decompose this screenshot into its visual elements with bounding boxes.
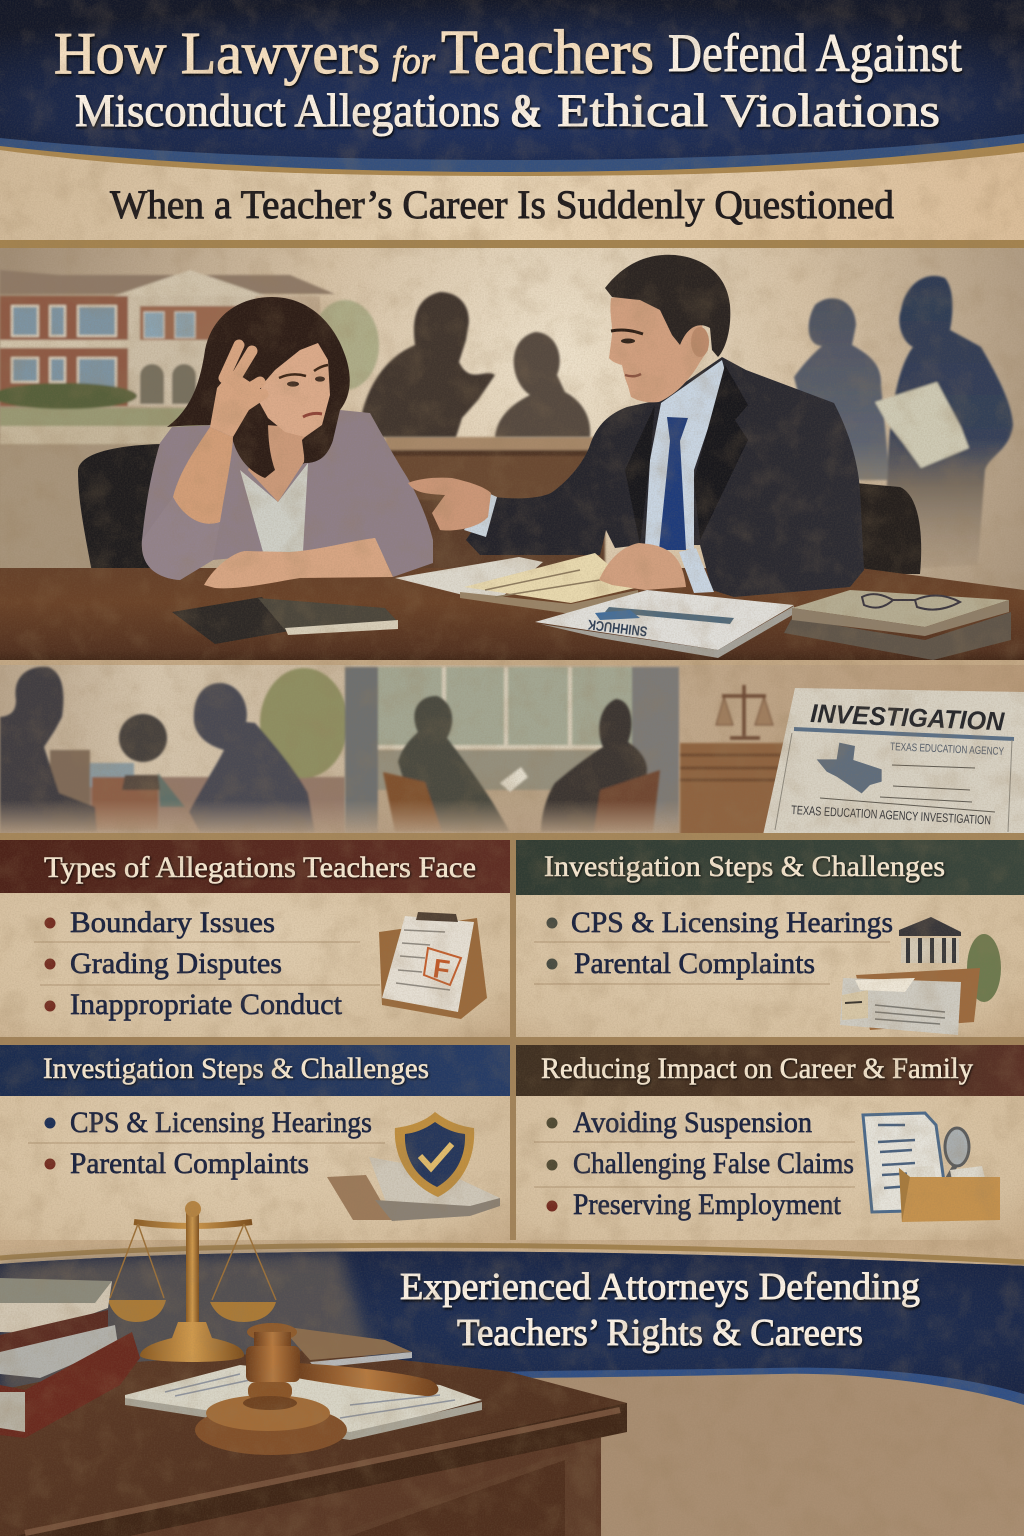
- hair over neck: [232, 415, 275, 478]
- tee: [240, 463, 308, 552]
- title line 2: Misconduct Allegations: [75, 85, 500, 137]
- icon: stack of law books: [0, 1278, 140, 1438]
- school building: [0, 270, 379, 570]
- family scene: [0, 667, 348, 835]
- list: Grading Disputes: [70, 947, 282, 980]
- panel heading: Types of Allegations Teachers Face: [44, 851, 476, 884]
- list: Boundary Issues: [70, 906, 275, 939]
- panel: investigation steps (bottom left): [0, 1045, 510, 1245]
- man: lawyer in suit: [408, 255, 864, 597]
- left adult silhouette: [0, 667, 97, 835]
- title line 1: [54, 19, 962, 87]
- list: CPS & Licensing Hearings: [571, 906, 893, 939]
- raised forearm: [173, 427, 233, 524]
- woman: worried teacher: [142, 297, 433, 588]
- cardigan: [142, 410, 433, 580]
- shirt cuff: [464, 493, 497, 537]
- neck and chest: [248, 425, 306, 502]
- texas map: [817, 743, 882, 793]
- face: [258, 343, 330, 437]
- title line 2: [75, 85, 940, 137]
- panel heading bar: [0, 840, 510, 893]
- raised hand: [210, 345, 263, 437]
- panel heading bar: [516, 840, 1024, 895]
- man's chair: [855, 483, 921, 574]
- panel heading: Investigation Steps & Challenges: [43, 1052, 429, 1085]
- icon: shield with check over books: [327, 1112, 500, 1221]
- panel: types of allegations: [0, 840, 510, 1037]
- woman's chair: [78, 444, 162, 572]
- window and curtains: [345, 667, 679, 835]
- icon: wooden gavel: [195, 1323, 438, 1455]
- closing line 2: Teachers’ Rights & Careers: [457, 1312, 863, 1354]
- list: [546, 1106, 854, 1221]
- list: Parental Complaints: [70, 1147, 309, 1180]
- man's eyes: [611, 330, 643, 376]
- hair: [167, 297, 350, 478]
- panel heading: Reducing Impact on Career & Family: [541, 1052, 973, 1085]
- title line 1: Defend Against: [668, 23, 962, 83]
- legal papers: [395, 553, 638, 614]
- title line 2: Ethical Violations: [557, 85, 940, 137]
- silhouettes: officials at right: [794, 276, 1013, 570]
- panel: investigation steps (top right): [516, 840, 1024, 1037]
- list: Preserving Employment: [573, 1188, 842, 1221]
- sleeve cuff: [142, 497, 220, 580]
- title line 1: How Lawyers: [54, 20, 380, 86]
- icon: clipboard with failing grade: [379, 912, 487, 1019]
- panel dividers: [0, 840, 1024, 1245]
- icon: brass scales: [108, 1201, 276, 1362]
- document under gavel: [125, 1326, 482, 1440]
- panel heading bar: [0, 1045, 510, 1096]
- title line 1: Teachers: [441, 19, 654, 87]
- eyes and brows: [279, 365, 328, 417]
- list: CPS & Licensing Hearings: [70, 1106, 372, 1139]
- title line 2: &: [510, 85, 542, 137]
- footer background: [0, 1240, 1024, 1536]
- notebook: [172, 597, 398, 644]
- list: Avoiding Suspension: [573, 1106, 812, 1139]
- silhouettes: parent and child in centre: [358, 292, 590, 437]
- ear: [691, 327, 709, 357]
- pointing hand: [408, 478, 491, 530]
- list: [44, 906, 343, 1021]
- subtitle band: [0, 130, 1024, 242]
- panel heading bar: [516, 1045, 1024, 1096]
- hand on documents: [599, 543, 714, 593]
- interview silhouettes: [383, 696, 660, 832]
- list: Parental Complaints: [574, 947, 815, 980]
- investigation document: [763, 688, 1024, 835]
- lower scenes strip: [0, 665, 1024, 840]
- child silhouette: [119, 714, 167, 762]
- list: [546, 906, 893, 980]
- suit jacket: [466, 357, 864, 597]
- panel heading: Investigation Steps & Challenges: [544, 850, 945, 883]
- stacked folders and glasses: [784, 590, 1011, 660]
- list: Inappropriate Conduct: [70, 988, 343, 1021]
- document heading: INVESTIGATION: [810, 698, 1006, 737]
- summary report: [535, 590, 794, 658]
- icon: courthouse and case folders: [840, 917, 1001, 1035]
- tie: [659, 417, 688, 550]
- resting arm and hand: [204, 538, 393, 588]
- judge's desk: [0, 1350, 627, 1536]
- title line 1: for: [392, 40, 435, 82]
- bottom haze: [0, 800, 680, 835]
- list: [44, 1106, 372, 1180]
- icon: clipboard with failing grade: F: [431, 953, 452, 985]
- hero illustration: teacher and lawyer at desk: [0, 240, 1024, 667]
- scales on ledge: [680, 685, 790, 835]
- header banner: [0, 0, 1024, 176]
- icon: checklist, magnifier and file box: [863, 1113, 1000, 1222]
- wooden desk: [0, 568, 1024, 665]
- panel: reducing impact: [516, 1045, 1024, 1245]
- far wall desk: [385, 437, 605, 570]
- right adult silhouette: [189, 683, 315, 833]
- lapels: [625, 365, 748, 545]
- face: [609, 295, 708, 402]
- closing line 1: Experienced Attorneys Defending: [400, 1266, 920, 1308]
- list: Challenging False Claims: [573, 1147, 854, 1180]
- footer banner: [0, 1245, 1024, 1405]
- subtitle text: When a Teacher’s Career Is Suddenly Questioned: [110, 182, 894, 227]
- man's hair: [605, 255, 730, 357]
- mirrored label on report: SNIHHUCK: [587, 617, 648, 640]
- shirt: [645, 360, 726, 550]
